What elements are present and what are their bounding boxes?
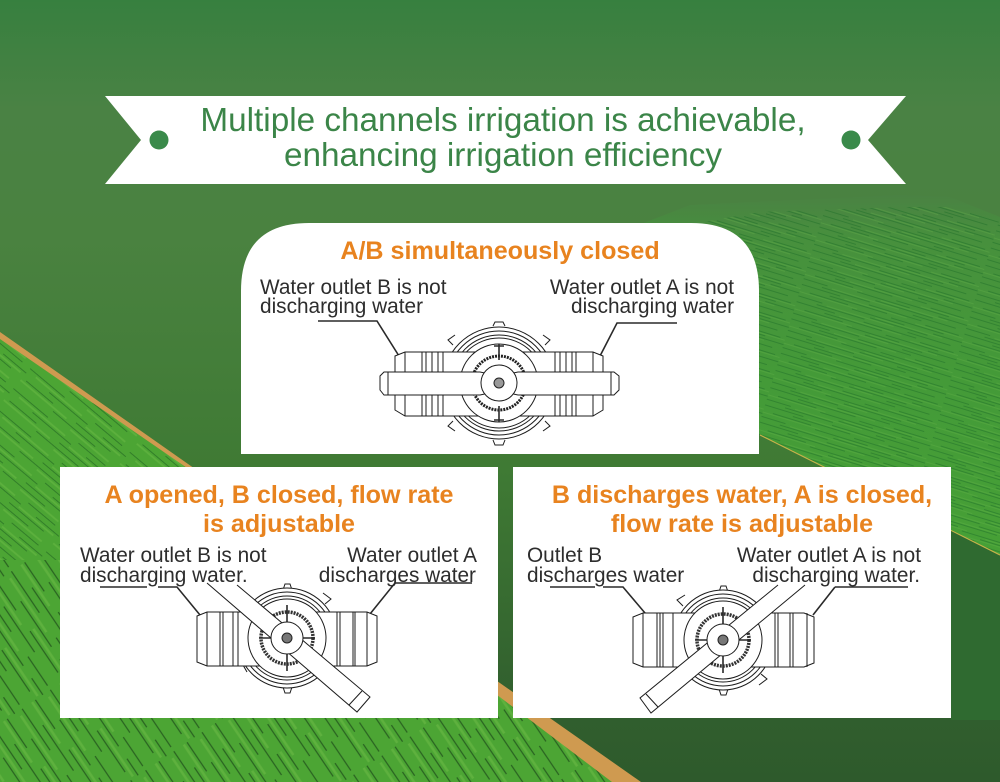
heading: B discharges water, A is closed, bbox=[552, 481, 932, 509]
heading: A opened, B closed, flow rate bbox=[104, 481, 454, 509]
leader line: outlet A bbox=[813, 587, 908, 615]
valve diagram: both closed bbox=[380, 322, 619, 445]
panel: B discharges, A closed bbox=[513, 467, 951, 718]
heading: A/B simultaneously closed bbox=[340, 237, 660, 265]
label: outlet A: Water outlet A is not bbox=[737, 544, 921, 567]
label: outlet B: discharging water. bbox=[80, 564, 248, 587]
heading: is adjustable bbox=[203, 510, 355, 538]
icon: right dot bbox=[842, 130, 860, 150]
panel background bbox=[241, 223, 759, 454]
leader line: outlet B bbox=[318, 321, 399, 356]
panel: A opened, B closed bbox=[60, 467, 498, 718]
panel: A/B simultaneously closed bbox=[241, 223, 759, 454]
label: outlet B: discharging water bbox=[260, 295, 423, 318]
label: outlet A: Water outlet A bbox=[347, 544, 477, 567]
background: left crop field bbox=[0, 330, 641, 782]
background: lower right dark field bbox=[951, 531, 1000, 720]
banner ribbon bbox=[105, 96, 906, 184]
leader line: outlet A bbox=[600, 323, 677, 356]
label: outlet B: Outlet B bbox=[527, 544, 602, 567]
heading: flow rate is adjustable bbox=[611, 510, 873, 538]
label: outlet B: Water outlet B is not bbox=[80, 544, 266, 567]
label: outlet A: discharging water bbox=[571, 295, 734, 318]
panel background bbox=[60, 467, 498, 718]
panel background bbox=[513, 467, 951, 718]
icon: left dot bbox=[150, 130, 168, 150]
title: enhancing irrigation efficiency bbox=[284, 137, 722, 174]
label: outlet B: Water outlet B is not bbox=[260, 276, 446, 299]
valve diagram: A open bbox=[197, 583, 377, 712]
label: outlet A: Water outlet A is not bbox=[550, 276, 734, 299]
leader line: outlet A bbox=[370, 583, 472, 614]
background: right crop field bbox=[600, 195, 1000, 555]
valve diagram: B open bbox=[633, 585, 814, 713]
label: outlet B: discharges water bbox=[527, 564, 684, 587]
banner bbox=[105, 96, 906, 184]
leader line: outlet B bbox=[550, 587, 645, 613]
label: outlet A: discharges water bbox=[319, 564, 476, 587]
label: outlet A: discharging water. bbox=[752, 564, 920, 587]
leader line: outlet B bbox=[100, 587, 200, 615]
title: Multiple channels irrigation is achievable, bbox=[200, 102, 806, 139]
